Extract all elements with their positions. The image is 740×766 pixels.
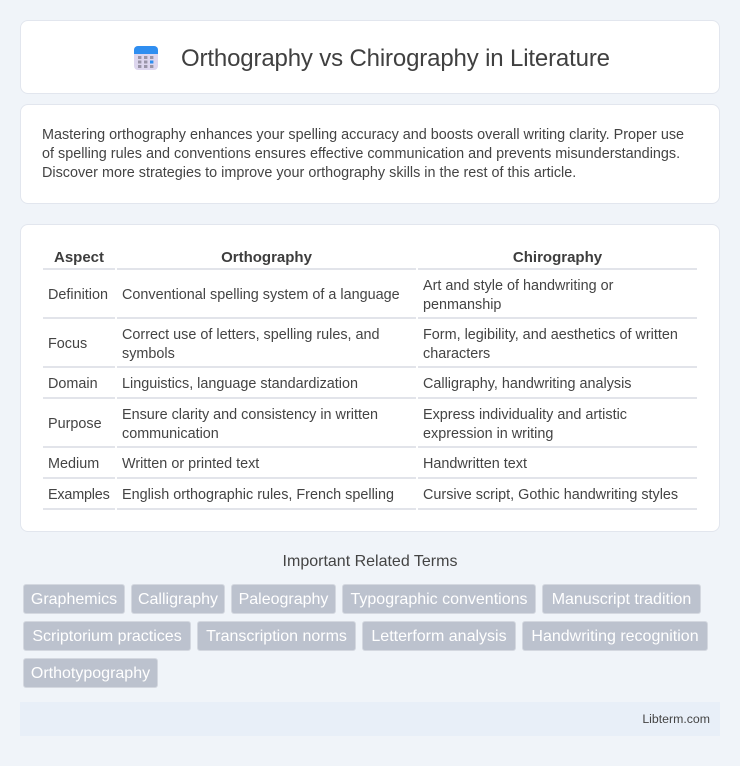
tag: Typographic conventions: Typographic conventions (350, 591, 528, 608)
related terms heading: Important Related Terms (283, 553, 457, 570)
comparison table: Correct use of letters, spelling rules, and (122, 327, 380, 343)
comparison table: Art and style of handwriting or (423, 278, 613, 294)
icon: calendar (134, 46, 158, 70)
intro paragraph: of spelling rules and conventions ensures effective communication and prevents misunderstandings. (42, 146, 680, 162)
tag: Handwriting recognition: Handwriting recognition (531, 628, 699, 645)
comparison table (43, 249, 697, 510)
table header (54, 249, 602, 266)
row: focus (48, 327, 678, 362)
tag: Typographic conventions (342, 584, 536, 614)
comparison table: Linguistics, language standardization (122, 376, 358, 392)
tag: Letterform analysis (362, 621, 516, 651)
tag: Paleography (231, 584, 336, 614)
tag: Orthotypography (23, 658, 158, 688)
comparison table: Form, legibility, and aesthetics of written (423, 327, 678, 343)
comparison table: symbols (122, 346, 175, 362)
comparison table: Examples (48, 487, 110, 503)
related term tags (23, 584, 708, 688)
footer credit: Libterm.com (642, 712, 710, 726)
tag: Calligraphy (131, 584, 225, 614)
tag: Orthotypography: Orthotypography (31, 665, 150, 682)
intro paragraph: Mastering orthography enhances your spelling accuracy and boosts overall writing clarity. Proper use (42, 127, 684, 143)
row: examples (48, 487, 678, 503)
intro paragraph (42, 127, 684, 181)
comparison table: Medium (48, 456, 99, 472)
comparison table: communication (122, 426, 219, 442)
comparison table: Orthography (221, 249, 312, 266)
tag: Graphemics: Graphemics (31, 591, 117, 608)
tag: Handwriting recognition (522, 621, 708, 651)
comparison table: Definition (48, 287, 108, 303)
comparison table: Ensure clarity and consistency in written (122, 407, 378, 423)
title: Orthography vs Chirography in Literature (181, 45, 610, 72)
comparison table: characters (423, 346, 490, 362)
comparison table: English orthographic rules, French spelling (122, 487, 394, 503)
row: domain (48, 376, 632, 392)
tag: Manuscript tradition (542, 584, 701, 614)
intro text panel (20, 104, 720, 204)
comparison table: Purpose (48, 416, 102, 432)
intro paragraph: Discover more strategies to improve your orthography skills in the rest of this article. (42, 165, 576, 181)
comparison table: Cursive script, Gothic handwriting styles (423, 487, 678, 503)
header panel (20, 20, 720, 94)
comparison table: Express individuality and artistic (423, 407, 627, 423)
comparison table: penmanship (423, 297, 501, 313)
comparison table: Conventional spelling system of a language (122, 287, 400, 303)
comparison table: expression in writing (423, 426, 553, 442)
tag: Scriptorium practices (23, 621, 191, 651)
row: purpose (48, 407, 627, 442)
tag: Letterform analysis: Letterform analysis (371, 628, 507, 645)
tag: Scriptorium practices: Scriptorium practices (32, 628, 182, 645)
comparison table: Chirography (513, 249, 602, 266)
comparison table: Aspect (54, 249, 104, 266)
comparison table: Handwritten text (423, 456, 527, 472)
comparison table: Focus (48, 336, 87, 352)
tag: Manuscript tradition: Manuscript tradition (552, 591, 691, 608)
comparison table: Domain (48, 376, 98, 392)
tag: Graphemics (23, 584, 125, 614)
comparison table: Calligraphy, handwriting analysis (423, 376, 632, 392)
tag: Paleography: Paleography (239, 591, 328, 608)
comparison table panel (20, 224, 720, 532)
comparison table: Written or printed text (122, 456, 259, 472)
tag: Calligraphy: Calligraphy (138, 591, 218, 608)
row: medium (48, 456, 527, 472)
footer bar (20, 702, 720, 736)
row: definition (48, 278, 614, 313)
tag: Transcription norms (197, 621, 356, 651)
tag: Transcription norms: Transcription norms (206, 628, 347, 645)
